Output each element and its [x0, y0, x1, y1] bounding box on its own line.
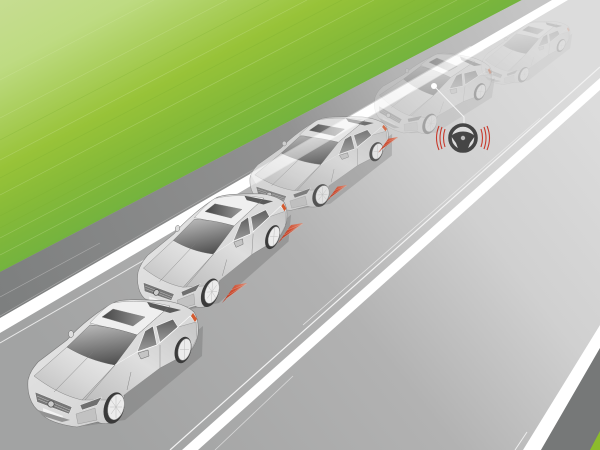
right grey shoulder [541, 348, 600, 450]
car 3 rear wheel warning [378, 137, 398, 153]
thin left lane line [0, 251, 160, 343]
green verge with motion streaks [0, 0, 522, 272]
centre double line: thick [182, 78, 600, 450]
pointer from car to steering wheel [431, 83, 464, 124]
right green corner [590, 431, 600, 450]
upper dashed lane line [303, 118, 540, 325]
shoulder lines [0, 160, 270, 316]
left white edge band [0, 0, 568, 333]
road stripe seen through cars [250, 46, 484, 184]
lower dashed lane line [215, 376, 293, 450]
short lane line bottom right [515, 432, 527, 450]
car 3 front wheel warning [327, 185, 347, 201]
car 4: faded position [371, 44, 497, 145]
car 3: semi-transparent position [248, 115, 394, 212]
car 2 front wheel warning [222, 283, 247, 303]
car 5: faded farthest position [479, 21, 574, 85]
right white edge band [523, 325, 600, 450]
car 2 rear wheel warning [278, 223, 303, 243]
centre double line: thin [170, 67, 600, 450]
grey shoulder [0, 0, 566, 326]
car 2 [135, 191, 293, 314]
icon: vibrating steering wheel [436, 125, 490, 151]
car 1: front car [28, 300, 203, 427]
